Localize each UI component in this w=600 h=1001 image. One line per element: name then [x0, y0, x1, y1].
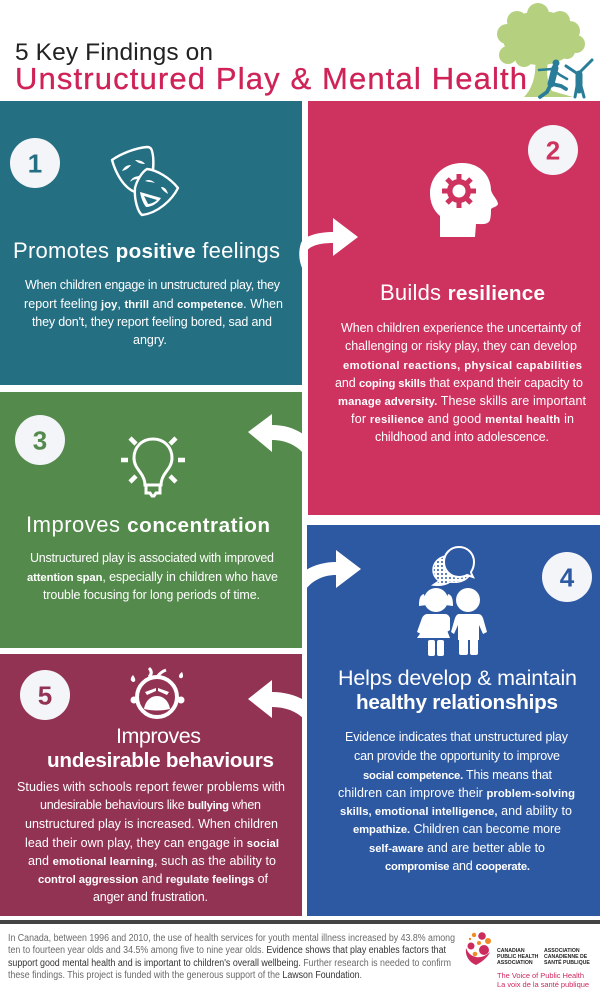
number badge 5	[20, 670, 70, 720]
logo mark	[466, 932, 491, 965]
arrow: 4 to 5	[248, 680, 304, 719]
icon: light bulb	[121, 438, 185, 496]
icon: head with gear	[430, 163, 498, 237]
title	[15, 39, 527, 96]
text block: When children engage in unstructured play, they	[25, 278, 281, 292]
text block: anger and frustration.	[93, 890, 208, 904]
arrow: 1 to 2	[299, 218, 358, 270]
panel: 2 resilience	[308, 101, 600, 515]
number badge 1: 1	[28, 148, 42, 178]
number badge 5: 5	[38, 680, 52, 710]
text block: angry.	[133, 333, 167, 347]
number badge 2: 2	[546, 136, 560, 166]
text block: unstructured play is increased. When children	[25, 817, 278, 831]
text block: control aggression and regulate feelings of	[38, 872, 269, 886]
logo tagline: The Voice of Public Health	[497, 971, 584, 980]
text block: compromise and cooperate.	[385, 859, 530, 873]
logo text: SANTÉ PUBLIQUE	[544, 958, 590, 966]
arrow: 2 to 3	[248, 414, 303, 453]
icon: theatre masks	[112, 147, 178, 215]
text block: childhood and into adolescence.	[375, 430, 549, 444]
text block: manage adversity. These skills are important	[338, 394, 587, 408]
number badge 1	[10, 138, 60, 188]
text block: Evidence indicates that unstructured play	[345, 730, 569, 744]
logo: Canadian Public Health Association	[466, 932, 590, 989]
text block: children can improve their problem-solving	[338, 786, 575, 800]
title: 5 Key Findings on	[15, 39, 213, 66]
icon: two children with speech bubbles	[417, 547, 487, 656]
logo text	[497, 948, 590, 966]
text block: they don't, they report feeling bored, sad and	[32, 315, 272, 329]
number badge 4: 4	[560, 562, 575, 592]
text block: skills, emotional intelligence, and ability to	[340, 804, 572, 818]
text block: report feeling joy, thrill and competence. When	[24, 297, 283, 311]
text block: social competence. This means that	[363, 768, 553, 782]
text block: footer note: support good mental health and is important to children's overall wellbeing. Further research is needed to confirm	[8, 958, 451, 969]
text block: footer note	[8, 933, 455, 981]
heading	[47, 724, 274, 772]
panel: 5 behaviours	[0, 654, 302, 916]
heading: Builds resilience	[380, 280, 545, 305]
text block: for resilience and good mental health in	[351, 412, 574, 426]
text block: empathize. Children can become more	[353, 822, 561, 836]
text block	[27, 551, 278, 602]
text block	[24, 278, 283, 347]
logo text: CANADIENNE DE	[544, 954, 588, 960]
text block: trouble focusing for long periods of time.	[43, 588, 260, 602]
logo text: ASSOCIATION	[497, 960, 533, 966]
text block: Studies with schools report fewer problems with	[17, 780, 285, 794]
logo text: CANADIAN	[497, 948, 525, 954]
text block: Unstructured play is associated with improved	[30, 551, 274, 565]
divider bar	[0, 920, 600, 924]
text block: attention span, especially in children who have	[27, 570, 278, 584]
title: Unstructured Play & Mental Health	[15, 61, 527, 96]
text block	[335, 321, 587, 444]
icon: tree with children playing	[497, 3, 592, 97]
text block: emotional reactions, physical capabilities	[343, 360, 582, 372]
text block: lead their own play, they can engage in social	[25, 836, 279, 850]
text block: footer note: these findings. This project is funded with the generous support of the Lawson Foundation.	[8, 970, 362, 981]
text block: undesirable behaviours like bullying when	[40, 798, 261, 812]
heading: undesirable behaviours	[47, 749, 274, 772]
text block: footer note: In Canada, between 1996 and 2010, the use of health services for youth mental illness increased by 43.8% among	[8, 933, 455, 944]
panel: 3 concentration	[0, 392, 302, 648]
logo tagline: La voix de la santé publique	[497, 980, 589, 989]
heading: Improves	[116, 724, 201, 748]
heading: Helps develop & maintain	[338, 666, 577, 690]
icon: crying baby	[130, 668, 184, 717]
text block: challenging or risky play, they can develop	[345, 339, 577, 353]
text block: When children experience the uncertainty of	[341, 321, 582, 335]
number badge 2	[528, 125, 578, 175]
number badge 3: 3	[33, 426, 47, 456]
heading	[338, 666, 577, 714]
heading: healthy relationships	[356, 691, 558, 714]
logo tagline	[497, 971, 589, 989]
heading: Promotes positive feelings	[13, 238, 280, 263]
logo text: ASSOCIATION	[544, 948, 580, 954]
text block: footer note: ten to fourteen year olds and 34.5% among five to nine year olds. Evidence shows that play enables factors that	[8, 945, 446, 956]
text block: self-aware and are better able to	[369, 841, 545, 855]
text block	[17, 780, 285, 904]
panel: 4 relationships	[307, 525, 600, 916]
panel: 1 positive feelings	[0, 101, 302, 385]
text block	[338, 730, 575, 873]
arrow: 3 to 4	[306, 550, 361, 589]
heading: Improves concentration	[26, 512, 270, 537]
text block: can provide the opportunity to improve	[354, 749, 560, 763]
text block: and emotional learning, such as the ability to	[28, 854, 276, 868]
number badge 4	[542, 552, 592, 602]
logo text: PUBLIC HEALTH	[497, 954, 539, 960]
text block: and coping skills that expand their capacity to	[335, 376, 583, 390]
number badge 3	[15, 415, 65, 465]
